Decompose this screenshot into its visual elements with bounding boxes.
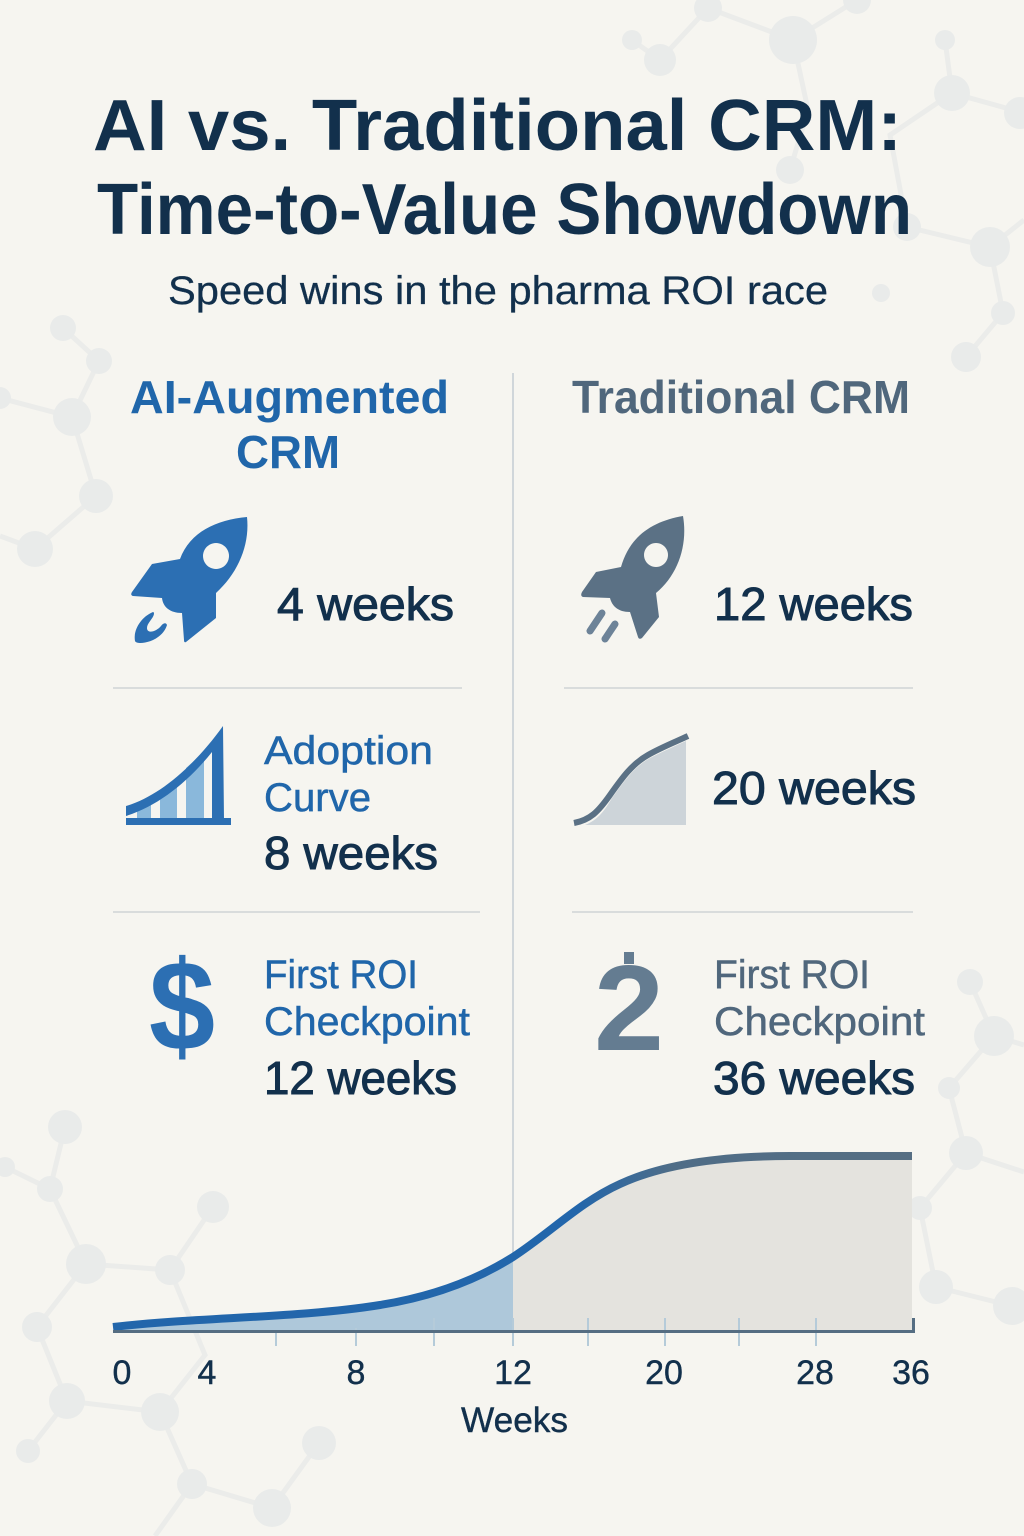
stat: 12 weeks: 12 weeks xyxy=(264,1052,457,1104)
heading: AI-Augmented CRM: AI-Augmented xyxy=(130,371,449,423)
icon: blue rocket xyxy=(131,517,247,643)
icon: two with stem: 2 xyxy=(594,940,664,1076)
label: Adoption Curve: Curve xyxy=(264,776,371,820)
chart: time-to-value curve xyxy=(113,1156,930,1440)
divider xyxy=(564,687,913,689)
x axis with ticks xyxy=(113,1318,915,1346)
curve line xyxy=(113,1156,912,1327)
divider xyxy=(113,687,462,689)
axis labels: 8 xyxy=(347,1354,365,1392)
label: First ROI Checkpoint: Checkpoint xyxy=(264,1000,470,1044)
label: First ROI Checkpoint: First ROI xyxy=(264,953,418,997)
title: Time-to-Value Showdown xyxy=(97,170,912,250)
axis labels: 12 xyxy=(494,1354,532,1392)
label: First ROI Checkpoint: First ROI xyxy=(714,953,870,997)
icon: adoption curve bars xyxy=(126,726,231,825)
stat: 20 weeks: 20 weeks xyxy=(712,762,916,814)
icon: dollar sign: $ xyxy=(149,935,215,1078)
axis labels: 20 xyxy=(645,1354,683,1392)
axis labels: 4 xyxy=(198,1354,216,1392)
heading: AI-Augmented CRM xyxy=(130,371,449,478)
area: traditional segment xyxy=(513,1158,912,1330)
heading: Traditional CRM: Traditional CRM xyxy=(572,371,910,423)
panel: AI-Augmented CRM xyxy=(113,371,480,1104)
icon: gray rocket xyxy=(581,516,684,639)
area: AI segment xyxy=(113,1259,513,1330)
stat: 8 weeks: 8 weeks xyxy=(264,827,438,879)
divider xyxy=(572,911,913,913)
label: First ROI Checkpoint xyxy=(714,953,925,1044)
axis labels: 36 xyxy=(892,1354,930,1392)
title: AI vs. Traditional CRM: xyxy=(93,86,902,166)
axis labels: 28 xyxy=(796,1354,834,1392)
label: Adoption Curve xyxy=(264,729,433,820)
center divider line xyxy=(512,373,514,1331)
axis title: Weeks xyxy=(461,1401,568,1440)
label: Adoption Curve: Adoption xyxy=(264,729,433,773)
label: First ROI Checkpoint xyxy=(264,953,470,1044)
subtitle: Speed wins in the pharma ROI race xyxy=(168,269,828,313)
panel: Traditional CRM xyxy=(564,371,925,1104)
axis labels xyxy=(113,1354,930,1392)
axis labels: 0 xyxy=(113,1354,131,1392)
heading: AI-Augmented CRM: CRM xyxy=(236,426,340,478)
icon: adoption curve area xyxy=(574,736,688,825)
label: First ROI Checkpoint: Checkpoint xyxy=(714,1000,925,1044)
title xyxy=(93,86,912,250)
stat: 4 weeks: 4 weeks xyxy=(277,578,454,630)
divider xyxy=(113,911,480,913)
stat: 12 weeks: 12 weeks xyxy=(714,578,913,630)
stat: 36 weeks: 36 weeks xyxy=(713,1052,915,1104)
